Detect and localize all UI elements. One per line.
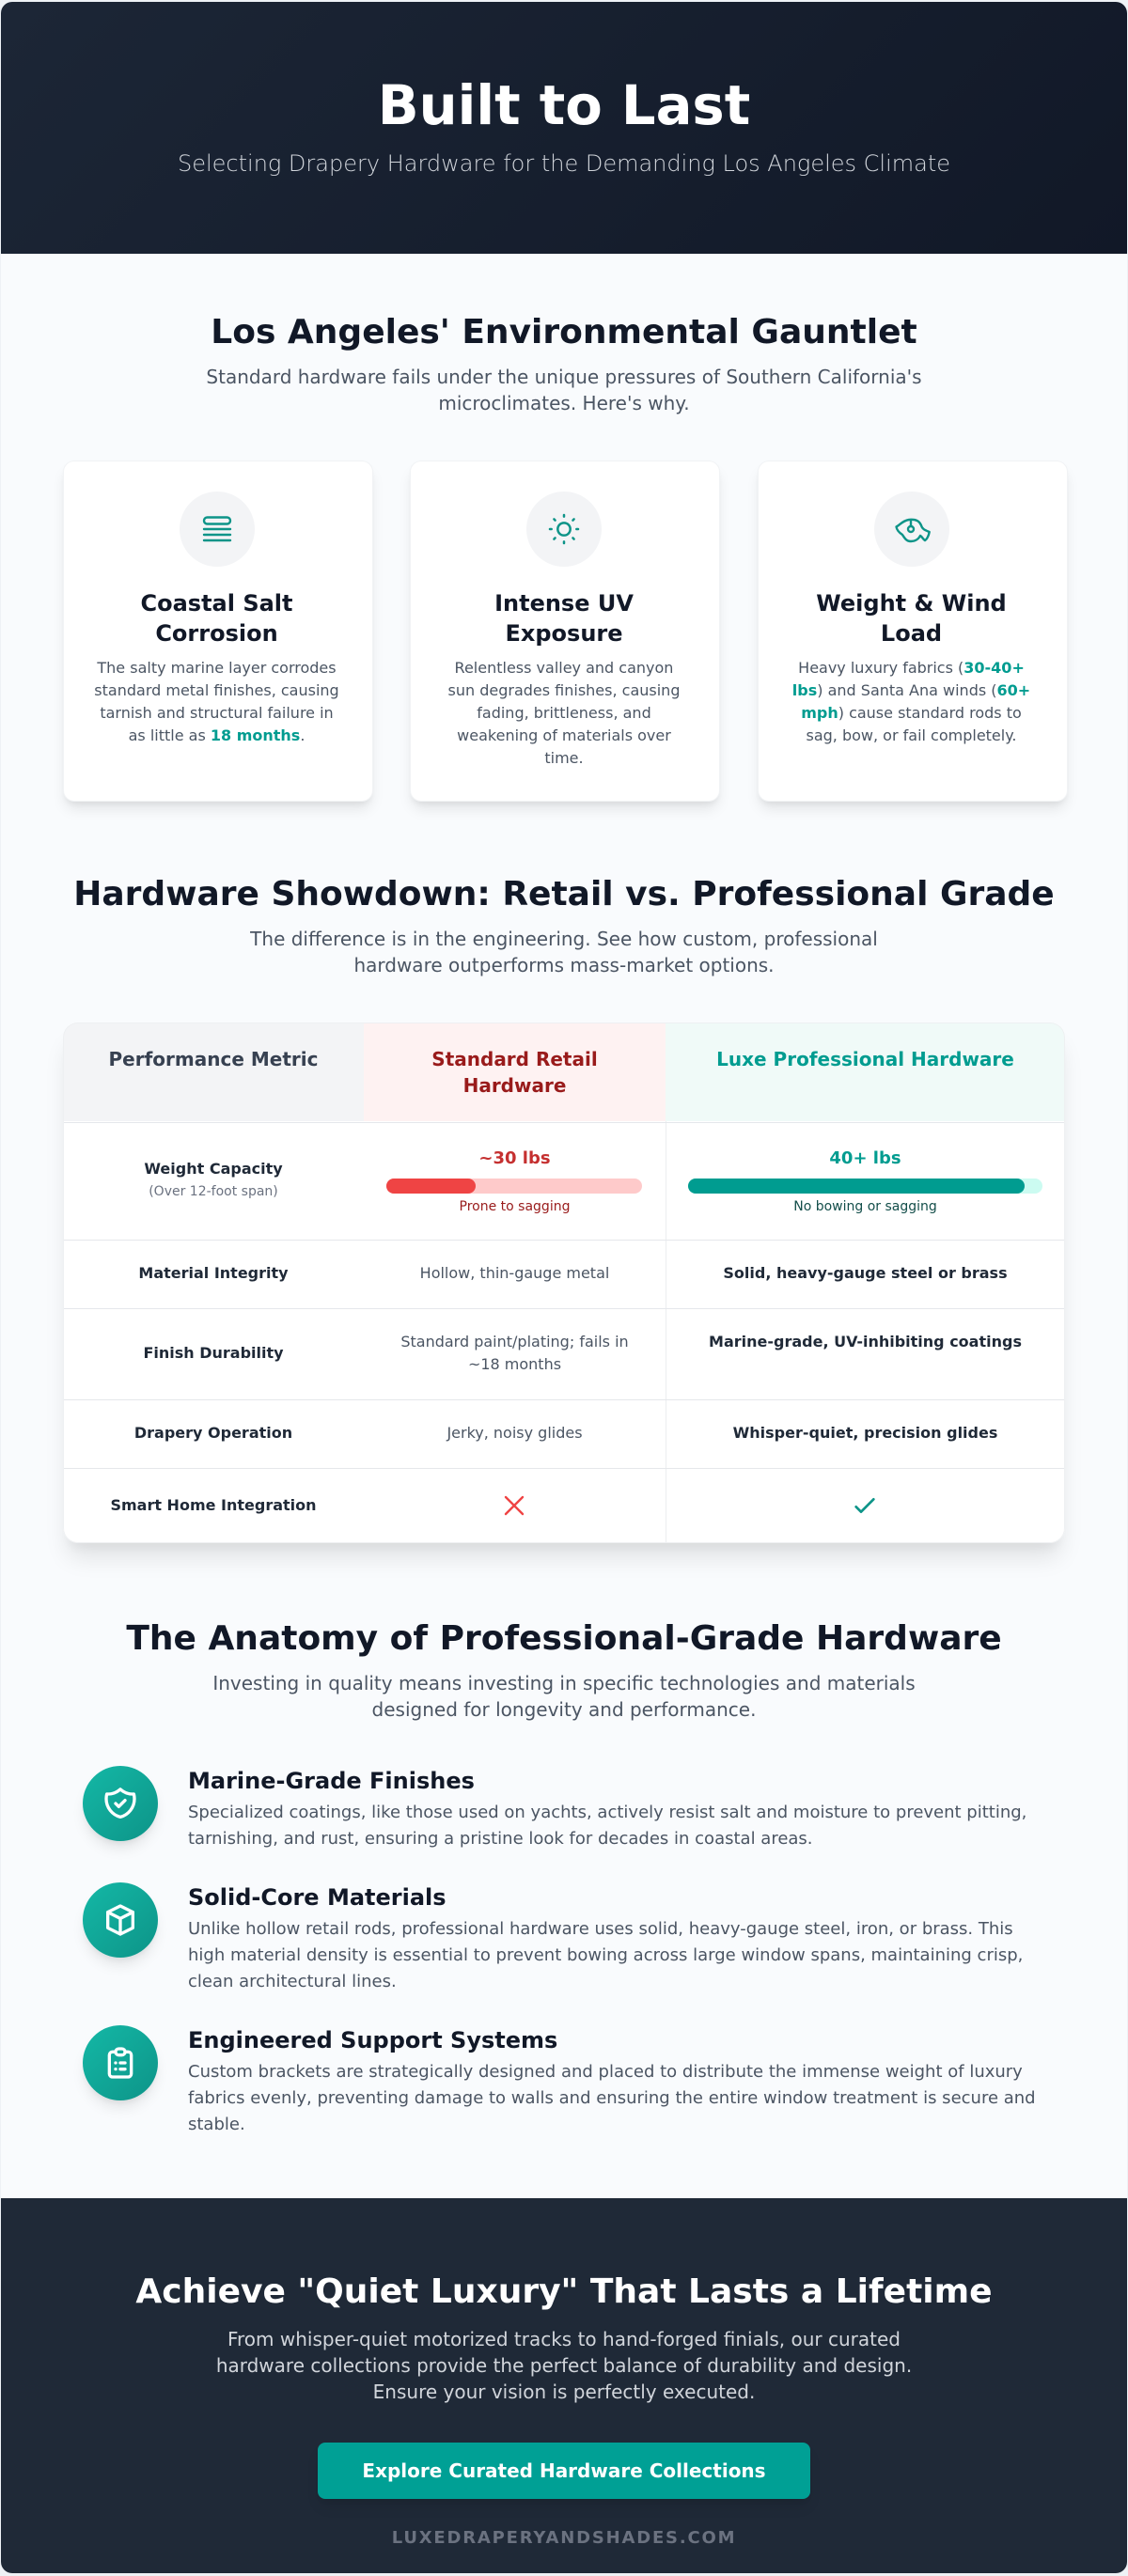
- feature: solid-core materials: [82, 1882, 1023, 1991]
- feature text: stable.: [188, 2115, 245, 2134]
- panel: coastal salt corrosion: [62, 461, 372, 802]
- retail value: Standard paint/plating; fails in: [400, 1333, 629, 1350]
- feature text: Custom brackets are strategically designed and placed to distribute the immense weight of luxury: [188, 2062, 1023, 2082]
- bar chart: professional capacity: [688, 1179, 1042, 1194]
- metric label: Weight Capacity: [144, 1160, 283, 1178]
- professional value: 40+ lbs: [829, 1148, 901, 1168]
- retail value: Jerky, noisy glides: [446, 1424, 583, 1442]
- professional value: Solid, heavy-gauge steel or brass: [723, 1264, 1008, 1282]
- feature text: Unlike hollow retail rods, professional hardware uses solid, heavy-gauge steel, iron, or brass. This: [188, 1919, 1013, 1939]
- column header: metric: [63, 1023, 364, 1121]
- card heading: Corrosion: [155, 620, 278, 647]
- comparison table: [63, 1023, 1065, 1543]
- icon: wind load: [874, 492, 949, 567]
- feature text: [188, 1803, 1026, 1849]
- card text: weakening of materials over: [457, 726, 671, 744]
- column header: professional: [666, 1023, 1065, 1121]
- metric note: (Over 12-foot span): [149, 1184, 278, 1199]
- header label: retail: [431, 1048, 598, 1097]
- icon: salt corrosion: [179, 492, 254, 567]
- retail value: Hollow, thin-gauge metal: [420, 1264, 609, 1282]
- card text: mph) cause standard rods to: [801, 704, 1022, 722]
- row: weight capacity: [63, 1122, 1065, 1241]
- intro text: hardware showdown: The difference is in the engineering. See how custom, professional: [250, 928, 878, 950]
- footer text: From whisper-quiet motorized tracks to hand-forged finials, our curated: [227, 2328, 901, 2350]
- footer text: [216, 2328, 912, 2403]
- header banner: [1, 2, 1127, 254]
- header label: metric: Performance Metric: [109, 1048, 318, 1070]
- card text: The salty marine layer corrodes: [97, 659, 337, 677]
- icon: sun: [526, 492, 602, 567]
- card text: tarnish and structural failure in: [100, 704, 334, 722]
- intro text: hardware showdown: hardware outperforms mass-market options.: [353, 954, 775, 976]
- feature heading: Marine-Grade Finishes: [188, 1768, 475, 1794]
- icon: cube: [83, 1882, 158, 1958]
- professional value: Whisper-quiet, precision glides: [733, 1424, 997, 1442]
- intro text: environmental gauntlet: microclimates. Here's why.: [438, 392, 690, 414]
- feature text: [188, 1919, 1023, 1991]
- retail value: ~30 lbs: [478, 1148, 551, 1168]
- row: drapery operation: [63, 1399, 1065, 1469]
- icon: clipboard: [83, 2025, 158, 2100]
- header label: professional: Luxe Professional Hardware: [716, 1048, 1014, 1070]
- heading: environmental gauntlet: Los Angeles' Environmental Gauntlet: [211, 313, 917, 351]
- row: smart home integration: [110, 1496, 875, 1515]
- card text: as little as 18 months.: [129, 726, 305, 744]
- subtitle: Selecting Drapery Hardware for the Demanding Los Angeles Climate: [178, 150, 950, 177]
- feature text: clean architectural lines.: [188, 1972, 397, 1991]
- feature: marine-grade finishes: [82, 1766, 1026, 1850]
- feature heading: Solid-Core Materials: [188, 1884, 446, 1911]
- intro text: environmental gauntlet: Standard hardware fails under the unique pressures of Southern California's: [206, 366, 922, 388]
- intro text: environmental gauntlet: [206, 366, 922, 414]
- metric label: Material Integrity: [138, 1264, 289, 1282]
- card text: lbs) and Santa Ana winds (60+: [792, 681, 1030, 699]
- card heading: [816, 590, 1007, 647]
- feature heading: Engineered Support Systems: [188, 2027, 557, 2053]
- table header row: [63, 1023, 1065, 1123]
- row: material integrity: [63, 1240, 1065, 1309]
- card heading: Load: [881, 620, 942, 647]
- card heading: Weight & Wind: [816, 590, 1007, 617]
- panel: intense UV exposure: [410, 461, 720, 802]
- row: finish durability: [63, 1308, 1065, 1400]
- column header: retail: [364, 1023, 666, 1121]
- card text: Heavy luxury fabrics (30-40+: [798, 659, 1025, 677]
- feature text: high material density is essential to prevent bowing across large window spans, maintaining crisp,: [188, 1945, 1023, 1965]
- card text: [447, 659, 680, 767]
- card text: standard metal finishes, causing: [94, 681, 339, 699]
- footer call to action: [1, 2198, 1127, 2573]
- metric label: Finish Durability: [143, 1344, 284, 1362]
- button: [318, 2443, 810, 2499]
- header label: retail: Hardware: [463, 1074, 566, 1097]
- footer text: Ensure your vision is perfectly executed.: [373, 2381, 755, 2403]
- retail value: [400, 1333, 629, 1373]
- heading: hardware showdown: Hardware Showdown: Retail vs. Professional Grade: [73, 875, 1055, 913]
- professional value: Marine-grade, UV-inhibiting coatings: [709, 1333, 1022, 1350]
- card text: fading, brittleness, and: [477, 704, 651, 722]
- feature: engineered support systems: [82, 2025, 1036, 2134]
- card heading: Intense UV: [494, 590, 634, 617]
- intro text: anatomy: [212, 1672, 916, 1721]
- intro text: hardware showdown: [250, 928, 878, 976]
- card heading: Exposure: [505, 620, 623, 647]
- intro text: anatomy: Investing in quality means investing in specific technologies and materials: [212, 1672, 916, 1694]
- metric label: Drapery Operation: [134, 1424, 292, 1442]
- retail note: Prone to sagging: [460, 1199, 570, 1214]
- feature text: Specialized coatings, like those used on yachts, actively resist salt and moisture to prevent pitting,: [188, 1803, 1026, 1822]
- icon: shield check: [83, 1766, 158, 1841]
- metric label: Smart Home Integration: [110, 1496, 317, 1514]
- button label: Explore Curated Hardware Collections: [362, 2459, 766, 2482]
- card text: [94, 659, 339, 744]
- title: Built to Last: [378, 74, 750, 137]
- card text: sun degrades finishes, causing: [447, 681, 680, 699]
- bar fill: professional: [688, 1179, 1025, 1194]
- footer heading: Achieve "Quiet Luxury" That Lasts a Lifetime: [135, 2272, 993, 2311]
- website address: LUXEDRAPERYANDSHADES.COM: [392, 2528, 736, 2548]
- card heading: [494, 590, 634, 647]
- card text: sag, bow, or fail completely.: [807, 726, 1017, 744]
- card text: Relentless valley and canyon: [455, 659, 673, 677]
- card heading: [140, 590, 293, 647]
- card text: [792, 659, 1030, 744]
- heading: anatomy: The Anatomy of Professional-Grade Hardware: [126, 1619, 1002, 1658]
- feature text: fabrics evenly, preventing damage to walls and ensuring the entire window treatment is secure and: [188, 2088, 1036, 2108]
- retail value: ~18 months: [468, 1355, 561, 1373]
- feature text: [188, 2062, 1036, 2134]
- intro text: anatomy: designed for longevity and performance.: [372, 1698, 756, 1721]
- bar fill: retail: [386, 1179, 476, 1194]
- professional note: No bowing or sagging: [793, 1199, 937, 1214]
- icon: cross: [504, 1496, 525, 1515]
- header label: retail: Standard Retail: [431, 1048, 598, 1070]
- card heading: Coastal Salt: [140, 590, 293, 617]
- icon: check: [854, 1498, 875, 1513]
- card text: time.: [544, 749, 584, 767]
- feature text: tarnishing, and rust, ensuring a pristine look for decades in coastal areas.: [188, 1829, 813, 1849]
- panel: weight and wind load: [758, 461, 1068, 802]
- footer text: hardware collections provide the perfect balance of durability and design.: [216, 2354, 912, 2377]
- bar chart: retail capacity: [386, 1179, 642, 1194]
